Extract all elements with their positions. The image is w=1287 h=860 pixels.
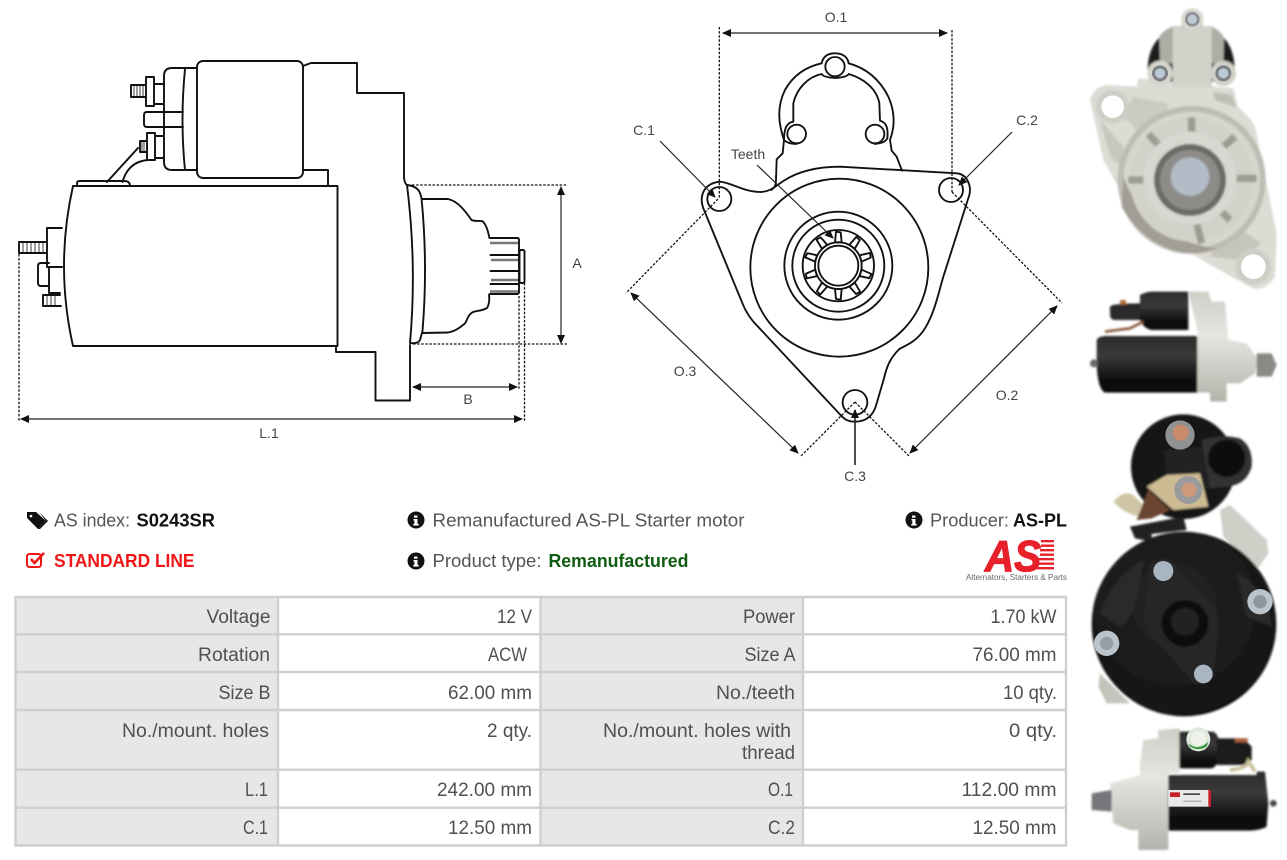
dimension O.3: O.3: [674, 363, 696, 379]
row: L.1 and O.1: [245, 780, 1056, 801]
callout C.1: [633, 122, 715, 197]
row: voltage and power: 12 V: [497, 607, 532, 628]
row: rotation and size A: ACW: [488, 645, 527, 666]
row: L.1 and O.1: 242.00 mm: [437, 780, 532, 801]
header: product type: Product type:: [432, 550, 542, 571]
concentric rings: [750, 179, 928, 357]
callout C.3: C.3: [844, 468, 866, 484]
upper terminal: [131, 77, 164, 106]
row: voltage and power: Voltage: [206, 607, 270, 628]
housing outline: [303, 63, 410, 400]
icon: tags: [27, 512, 48, 529]
logo: AS-PL: [966, 532, 1067, 582]
row: L.1 and O.1: L.1: [245, 780, 268, 801]
pinion teeth: [490, 238, 519, 294]
bolts: [1152, 12, 1231, 81]
wires: [107, 148, 148, 182]
terminals: [1165, 420, 1202, 504]
header: AS index: AS index:: [54, 510, 130, 530]
header: producer: [906, 510, 1067, 530]
row: size B and teeth: No./teeth: [716, 683, 795, 704]
flange and nose cone: [407, 185, 425, 343]
photo: starter rear view: [1092, 414, 1276, 716]
row: size B and teeth: [218, 683, 1057, 704]
mounting holes: [1101, 95, 1266, 279]
lower terminal: [140, 133, 164, 160]
row: voltage and power: 1.70 kW: [990, 607, 1057, 628]
callout Teeth: [731, 146, 833, 238]
callout Teeth: Teeth: [731, 146, 765, 162]
connector tab: [144, 112, 183, 127]
icon: info: [408, 552, 424, 570]
row: rotation and size A: Rotation: [198, 645, 270, 666]
logo: AS-PL: Alternators, Starters & Parts: [966, 573, 1067, 582]
dimension L.1: [19, 254, 524, 441]
row: mounting holes: thread: [742, 743, 795, 764]
row: C.1 and C.2: C.1: [243, 818, 268, 839]
dimension O.1: [719, 9, 952, 199]
row: mounting holes: [122, 721, 1057, 764]
left solenoid hole: [787, 125, 806, 143]
hole C.1: [707, 187, 731, 211]
icon: checked box: [27, 553, 44, 567]
row: rotation and size A: [198, 645, 1056, 666]
photo: starter front view: [1090, 8, 1277, 289]
solenoid mount: [771, 53, 902, 190]
callout C.2: C.2: [1016, 112, 1038, 128]
photo: starter side view, pinion right: [1090, 292, 1277, 402]
row: size B and teeth: 62.00 mm: [448, 683, 532, 704]
table grid: [15, 597, 1066, 846]
header: AS index: [27, 510, 215, 530]
header: product type: Remanufactured: [548, 550, 688, 571]
dimension O.2: O.2: [996, 387, 1018, 403]
motor top tab: [77, 181, 130, 186]
pinion tip: [520, 250, 524, 283]
row: C.1 and C.2: C.2: [768, 818, 795, 839]
row: L.1 and O.1: 112.00 mm: [962, 780, 1056, 801]
green sticker: [1186, 727, 1210, 751]
row: mounting holes: No./mount. holes: [122, 721, 269, 742]
front view technical drawing: [626, 9, 1062, 484]
row: L.1 and O.1: O.1: [768, 780, 793, 801]
header: producer: Producer:: [930, 510, 1009, 530]
callout C.2: [959, 112, 1038, 185]
row: rotation and size A: 76.00 mm: [972, 645, 1056, 666]
logo: AS-PL: AS: [984, 532, 1041, 581]
dimension A: A: [572, 255, 582, 271]
callout C.1: C.1: [633, 122, 655, 138]
row: mounting holes: 0 qty.: [1009, 721, 1057, 742]
specification table: [15, 597, 1066, 846]
screws: [1094, 561, 1273, 683]
icon: info: [408, 512, 424, 528]
dimension A: [412, 185, 582, 344]
icon: info: [906, 512, 922, 528]
rear terminals: [19, 228, 62, 306]
dimension O.1: O.1: [825, 9, 847, 25]
header: AS index: S0243SR: [136, 510, 215, 530]
row: C.1 and C.2: 12.50 mm: [448, 818, 532, 839]
dimension B: B: [463, 391, 473, 407]
header: product name: Remanufactured AS-PL Starter motor: [432, 510, 744, 530]
header: standard line: STANDARD LINE: [54, 550, 194, 571]
photo: starter side view, pinion left: [1092, 727, 1277, 850]
row: rotation and size A: Size A: [744, 645, 796, 666]
side view technical drawing: [19, 61, 582, 441]
hole C.3: [843, 390, 867, 415]
row: size B and teeth: Size B: [218, 683, 270, 704]
product label: [1168, 790, 1211, 807]
header: producer: AS-PL: [1013, 510, 1067, 530]
dimension O.3: [626, 199, 855, 456]
row: voltage and power: [206, 607, 1057, 628]
dimension B: [413, 296, 519, 407]
top hole: [825, 57, 845, 76]
row: mounting holes: 2 qty.: [487, 721, 532, 742]
row: size B and teeth: 10 qty.: [1003, 683, 1057, 704]
row: C.1 and C.2: 12.50 mm: [972, 818, 1056, 839]
row: voltage and power: Power: [743, 607, 796, 628]
hole C.2: [939, 178, 963, 202]
callout C.3: [844, 410, 866, 484]
header: product type: [408, 550, 688, 571]
mounting plate outline: [702, 167, 970, 422]
solenoid body: [197, 61, 303, 178]
solenoid rear cap: [164, 68, 197, 170]
dimension O.2: [855, 192, 1062, 457]
pinion teeth: [805, 232, 872, 300]
row: mounting holes: No./mount. holes with: [603, 721, 791, 742]
dimension L.1: L.1: [259, 425, 279, 441]
motor body: [64, 186, 338, 346]
right solenoid hole: [866, 125, 884, 143]
row: C.1 and C.2: [243, 818, 1056, 839]
